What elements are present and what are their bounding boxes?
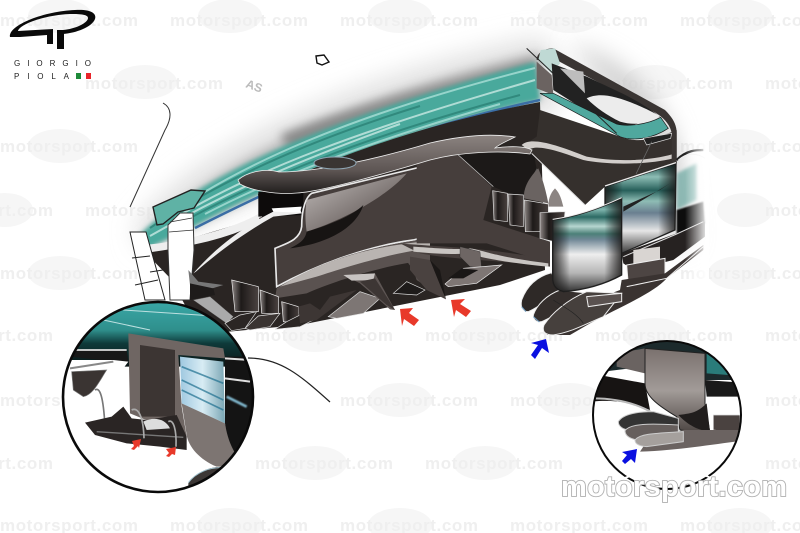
- wheel-side left elements: [130, 103, 205, 300]
- rear shadow behind the cape: [570, 45, 690, 250]
- main floor panel: [193, 157, 463, 298]
- centre fins: [400, 243, 550, 299]
- car body shading: [135, 36, 690, 250]
- watermark pattern: motorsport.com: [340, 391, 478, 410]
- leader line: [248, 358, 330, 402]
- watermark pattern: motorsport.com: [595, 74, 733, 93]
- logo: Giorgio Piola: PIOLA: [14, 72, 70, 81]
- inset: right circle detail: [590, 340, 750, 489]
- arrow: red left: [400, 308, 419, 326]
- arrow: red right: [451, 299, 471, 317]
- watermark pattern: motorsport.com: [425, 326, 563, 345]
- cape frame: [537, 48, 677, 163]
- watermark pattern: motorsport.com: [425, 454, 563, 473]
- nose structure and cape: [417, 48, 677, 263]
- teal top band: [72, 303, 243, 367]
- fingers at wing tip: [521, 273, 622, 335]
- endplate front: [553, 198, 622, 292]
- watermark pattern: motorsport.com: [85, 74, 223, 93]
- watermark pattern: motorsport.com: [340, 11, 478, 30]
- arrow: inset left red 2: [166, 447, 176, 457]
- watermark pattern: motorsport.com: [0, 137, 138, 156]
- body under cape: [522, 110, 677, 205]
- right edge fade: [685, 120, 709, 290]
- logo: Giorgio Piola: [10, 10, 95, 81]
- upper lip vane: [238, 135, 532, 193]
- GP mark: [10, 10, 95, 44]
- open white area: [69, 360, 128, 367]
- inset: left circle detail: [60, 300, 263, 492]
- footplate: [85, 407, 187, 450]
- white body stripe: [145, 214, 260, 253]
- logo text: GIORGIO: [14, 59, 91, 68]
- watermark pattern: motorsport.com: [0, 391, 138, 410]
- right wing tail bands: [547, 150, 705, 335]
- car body shading: AS: [244, 77, 264, 96]
- side glass: [180, 357, 225, 423]
- mirror pylon: [168, 213, 194, 300]
- watermark pattern: motorsport.com: [85, 201, 223, 220]
- small pylon marker: [316, 55, 329, 65]
- watermark pattern: motorsport.com: [255, 326, 393, 345]
- watermark pattern: motorsport.com: [510, 11, 648, 30]
- left vane: [72, 370, 107, 397]
- watermark pattern: motorsport.com: [255, 454, 393, 473]
- watermark pattern: motorsport.com: [595, 326, 733, 345]
- teal bodywork stripes: [135, 62, 540, 252]
- footplate fin 1: [328, 292, 380, 318]
- watermark pattern: motorsport.com: [0, 11, 138, 30]
- endplate rear: [605, 163, 676, 253]
- watermark pattern: motorsport.com: [170, 11, 308, 30]
- large motorsport watermark: motorsport.com: [561, 471, 787, 503]
- turning vanes: [523, 168, 538, 193]
- arrow: inset right blue: [622, 449, 637, 464]
- dark underbody: [145, 102, 545, 332]
- cascade vanes left: [188, 253, 427, 331]
- watermark pattern: motorsport.com: [510, 391, 648, 410]
- arrow: blue: [531, 339, 549, 359]
- watermark pattern: motorsport.com: [0, 264, 138, 283]
- arrow: inset left red 1: [131, 439, 141, 450]
